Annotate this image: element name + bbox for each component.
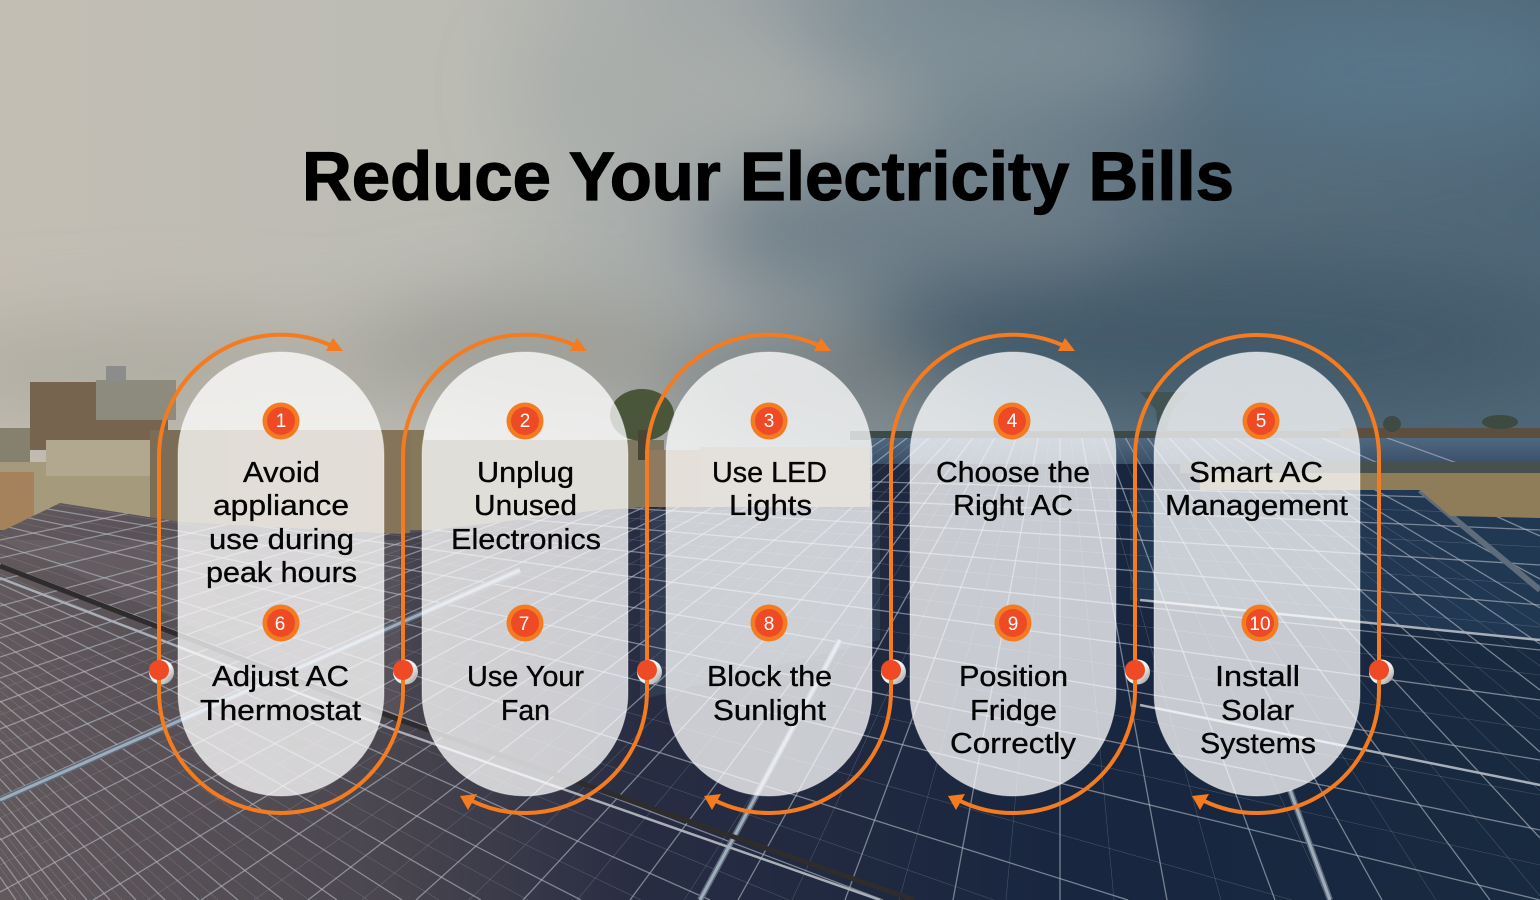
badge: step 7 bbox=[506, 604, 544, 642]
badge: step 9 bbox=[994, 604, 1032, 642]
badge: step 4: 4 bbox=[1007, 411, 1018, 432]
pill background 1 bbox=[178, 352, 384, 796]
text: step 6 bbox=[200, 661, 361, 727]
badge: step 8 bbox=[750, 604, 788, 642]
pill background 2 bbox=[422, 352, 628, 796]
background photo: distant buildings and trees bbox=[0, 366, 1540, 540]
text: step 3: Use LED bbox=[712, 457, 827, 489]
text: step 6: Adjust AC bbox=[212, 661, 349, 693]
text: step 4: Right AC bbox=[953, 490, 1073, 522]
text: step 8 bbox=[707, 661, 832, 727]
text: step 4 bbox=[936, 457, 1090, 522]
text: step 3: Lights bbox=[729, 490, 812, 522]
badge: step 9: 9 bbox=[1008, 614, 1018, 635]
badge: step 2: 2 bbox=[520, 411, 530, 432]
text: step 8: Block the bbox=[707, 661, 832, 693]
text: step 2: Electronics bbox=[451, 524, 601, 556]
badge: step 2 bbox=[506, 402, 544, 440]
panel: column 2 bbox=[422, 352, 628, 796]
text: step 2 bbox=[451, 457, 601, 556]
badge: step 3: 3 bbox=[764, 411, 774, 432]
panel: column 3 bbox=[666, 352, 872, 796]
pill background 5 bbox=[1154, 352, 1360, 796]
badge: step 5: 5 bbox=[1256, 411, 1266, 432]
background photo: sky bbox=[0, 0, 1540, 462]
badge: step 4 bbox=[994, 402, 1030, 440]
text: step 9: Correctly bbox=[950, 728, 1077, 760]
background photo: solar panel field bbox=[0, 438, 1540, 900]
text: step 9: Fridge bbox=[970, 695, 1057, 727]
badge: step 3 bbox=[750, 402, 788, 440]
panel: column 4 bbox=[910, 352, 1116, 796]
badge: step 8: 8 bbox=[764, 614, 774, 635]
text: step 10 bbox=[1200, 661, 1316, 760]
pill background 4 bbox=[910, 352, 1116, 796]
arrow path: from column 3 to column 4 bbox=[715, 335, 1062, 813]
text: step 10: Install bbox=[1215, 661, 1300, 693]
badge: step 6 bbox=[262, 604, 300, 642]
pill background 3 bbox=[666, 352, 872, 796]
text: step 1 bbox=[206, 457, 357, 589]
text: step 9 bbox=[950, 661, 1077, 760]
badge: step 10 bbox=[1242, 604, 1278, 642]
arrow path: from column 1 around to column 2 bbox=[159, 335, 574, 813]
panel: column 1 bbox=[178, 352, 384, 796]
badge: step 6: 6 bbox=[275, 614, 285, 635]
text: step 1: Avoid bbox=[243, 457, 320, 489]
text: step 10: Systems bbox=[1200, 728, 1316, 760]
text: step 7 bbox=[467, 661, 584, 727]
text: step 2: Unused bbox=[474, 490, 577, 522]
text: step 1: peak hours bbox=[206, 557, 357, 589]
text: step 7: Use Your bbox=[467, 661, 584, 693]
badge: step 7: 7 bbox=[519, 614, 529, 635]
text: step 4: Choose the bbox=[936, 457, 1090, 489]
connector dots bbox=[149, 660, 1389, 680]
panel: column 5 bbox=[1154, 352, 1360, 796]
badge: step 1 bbox=[262, 402, 300, 440]
text: step 1: use during bbox=[209, 524, 354, 556]
badge: step 10: 10 bbox=[1249, 614, 1271, 635]
arrowheads: top row bbox=[326, 338, 1075, 351]
text: step 7: Fan bbox=[501, 695, 550, 727]
arrow path: from column 4 around column 5 bbox=[959, 335, 1379, 813]
text: step 5 bbox=[1165, 457, 1348, 522]
text: step 2: Unplug bbox=[477, 457, 574, 489]
text: step 3 bbox=[712, 457, 827, 522]
text: step 1: appliance bbox=[213, 490, 349, 522]
text: step 6: Thermostat bbox=[200, 695, 361, 727]
badge: step 5 bbox=[1242, 402, 1280, 440]
title: Reduce Your Electricity Bills bbox=[302, 138, 1234, 215]
badge: step 1: 1 bbox=[276, 411, 286, 432]
text: step 5: Smart AC bbox=[1189, 457, 1323, 489]
text: step 10: Solar bbox=[1221, 695, 1294, 727]
text: step 9: Position bbox=[959, 661, 1068, 693]
text: step 8: Sunlight bbox=[713, 695, 826, 727]
text: step 5: Management bbox=[1165, 490, 1348, 522]
arrow path: from column 2 to column 3 bbox=[471, 335, 818, 813]
arrowheads: bottom row bbox=[460, 794, 1209, 810]
connector dot backings bbox=[149, 660, 1394, 684]
